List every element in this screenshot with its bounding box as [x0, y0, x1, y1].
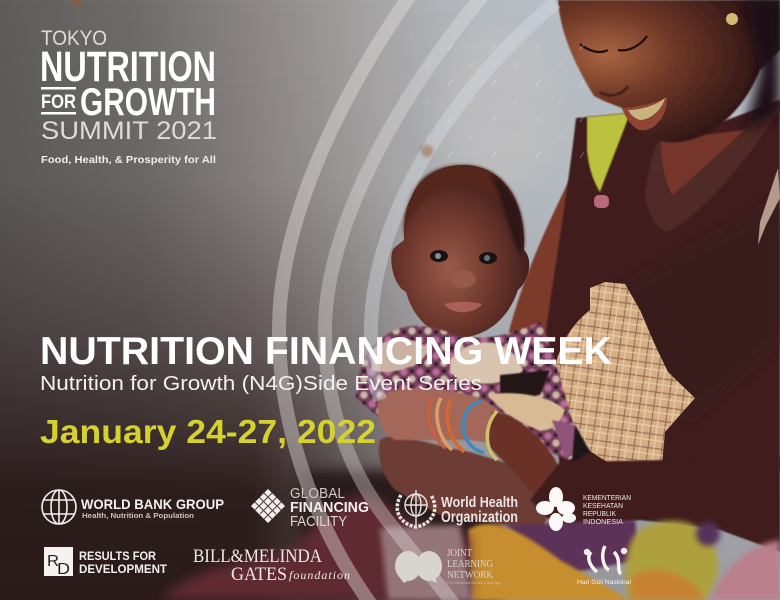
collar — [645, 100, 780, 232]
R4D box: D — [57, 561, 70, 578]
R4D box: R — [47, 553, 59, 570]
heading: NUTRITION FINANCING WEEK — [40, 330, 612, 373]
logo: Hari Gizi Nasional: Hari Gizi Nasional — [577, 580, 631, 586]
mother's neck — [660, 130, 745, 196]
logo: Joint Learning Network: LEARNING — [447, 559, 493, 570]
logo: Results for Development — [44, 547, 167, 578]
photo: foreground — [160, 458, 780, 600]
baby nose — [450, 270, 476, 288]
flower icon — [536, 487, 576, 531]
toy — [625, 521, 718, 600]
logo: Global Financing Facility: FINANCING — [290, 499, 369, 516]
yellow strap — [587, 113, 630, 192]
logo: World Bank Group — [42, 490, 224, 524]
logo: Kementerian Kesehatan: KEMENTERIAN — [583, 495, 631, 502]
yellow cloth — [468, 524, 630, 600]
photo: mother — [508, 0, 780, 470]
logo: Bill & Melinda Gates Foundation: BILL&MELINDA — [193, 546, 322, 567]
pink cloth — [710, 540, 780, 600]
logo: Results for Development: RESULTS FOR — [79, 551, 157, 563]
logo: Tokyo Nutrition for Growth Summit 2021: GROWTH — [80, 81, 216, 124]
logo: World Bank Group: Health, Nutrition & Population — [82, 513, 194, 520]
logo: Kementerian Kesehatan: REPUBLIK — [583, 511, 616, 518]
logo: Bill & Melinda Gates Foundation: GATES — [231, 564, 287, 585]
logo: Tokyo Nutrition for Growth Summit 2021: Food, Health, & Prosperity for All — [41, 154, 216, 166]
mother's shirt — [546, 100, 780, 470]
logo: Results for Development: DEVELOPMENT — [79, 564, 167, 576]
mother's eyes — [580, 36, 647, 52]
baby eyes — [430, 250, 497, 264]
mother's arm — [508, 170, 600, 350]
nose shadow — [600, 86, 628, 95]
logo: Tokyo Nutrition for Growth Summit 2021: TOKYO — [41, 27, 107, 50]
woven diamond icon — [251, 489, 285, 523]
logo: World Bank Group: WORLD BANK GROUP — [81, 496, 224, 512]
logo: Bill & Melinda Gates Foundation: foundation — [289, 568, 350, 582]
logo: Tokyo Nutrition for Growth Summit 2021: FOR — [41, 92, 76, 113]
watermark rain dashes — [420, 40, 590, 160]
arc bands — [279, 0, 556, 600]
logo: Tokyo Nutrition for Growth Summit 2021 — [40, 27, 217, 166]
photo: baby — [356, 165, 590, 530]
logo: Kementerian Kesehatan — [536, 487, 631, 531]
R4D box — [44, 547, 73, 578]
plaid patch — [553, 282, 695, 465]
logo: Joint Learning Network: JOINT — [447, 548, 472, 559]
logo: Kementerian Kesehatan: KESEHATAN — [583, 503, 623, 510]
logo: World Health Organization: World Health — [441, 494, 518, 511]
logo: Joint Learning Network: For Universal Health Coverage — [447, 580, 502, 585]
logo: Tokyo Nutrition for Growth Summit 2021: NUTRITION — [40, 43, 216, 91]
logo: Hari Gizi Nasional — [577, 546, 631, 586]
logo: Joint Learning Network — [395, 548, 502, 585]
logo: World Health Organization: Organization — [441, 509, 518, 526]
mother's face — [558, 0, 780, 142]
baby head — [391, 165, 529, 338]
subheading: Nutrition for Growth (N4G)Side Event Series — [40, 373, 482, 395]
baby arm — [378, 388, 510, 445]
figures icon — [586, 546, 626, 574]
zipper — [758, 168, 780, 245]
baby hand — [488, 412, 565, 495]
speech bubbles — [395, 551, 442, 583]
earring — [726, 13, 738, 25]
bangles — [428, 397, 497, 460]
mother's hand — [379, 437, 560, 530]
logo: Global Financing Facility — [251, 485, 369, 530]
logo: Global Financing Facility: FACILITY — [290, 513, 347, 530]
WHO emblem — [397, 490, 435, 527]
logo: Global Financing Facility: GLOBAL — [290, 485, 345, 502]
baby dress — [356, 322, 590, 462]
globe icon — [42, 490, 76, 524]
logo: Joint Learning Network: NETWORK — [447, 570, 494, 581]
baby mouth — [444, 302, 482, 312]
date: January 24-27, 2022 — [40, 413, 376, 450]
logo: World Health Organization — [397, 490, 518, 527]
smile — [622, 97, 667, 130]
fabric — [505, 520, 640, 575]
logo: Bill & Melinda Gates Foundation — [193, 546, 350, 585]
logo: Tokyo Nutrition for Growth Summit 2021: SUMMIT 2021 — [41, 117, 217, 145]
left cloth — [160, 495, 470, 600]
logo: Kementerian Kesehatan: INDONESIA — [583, 519, 623, 526]
mother's forearm — [530, 458, 780, 552]
